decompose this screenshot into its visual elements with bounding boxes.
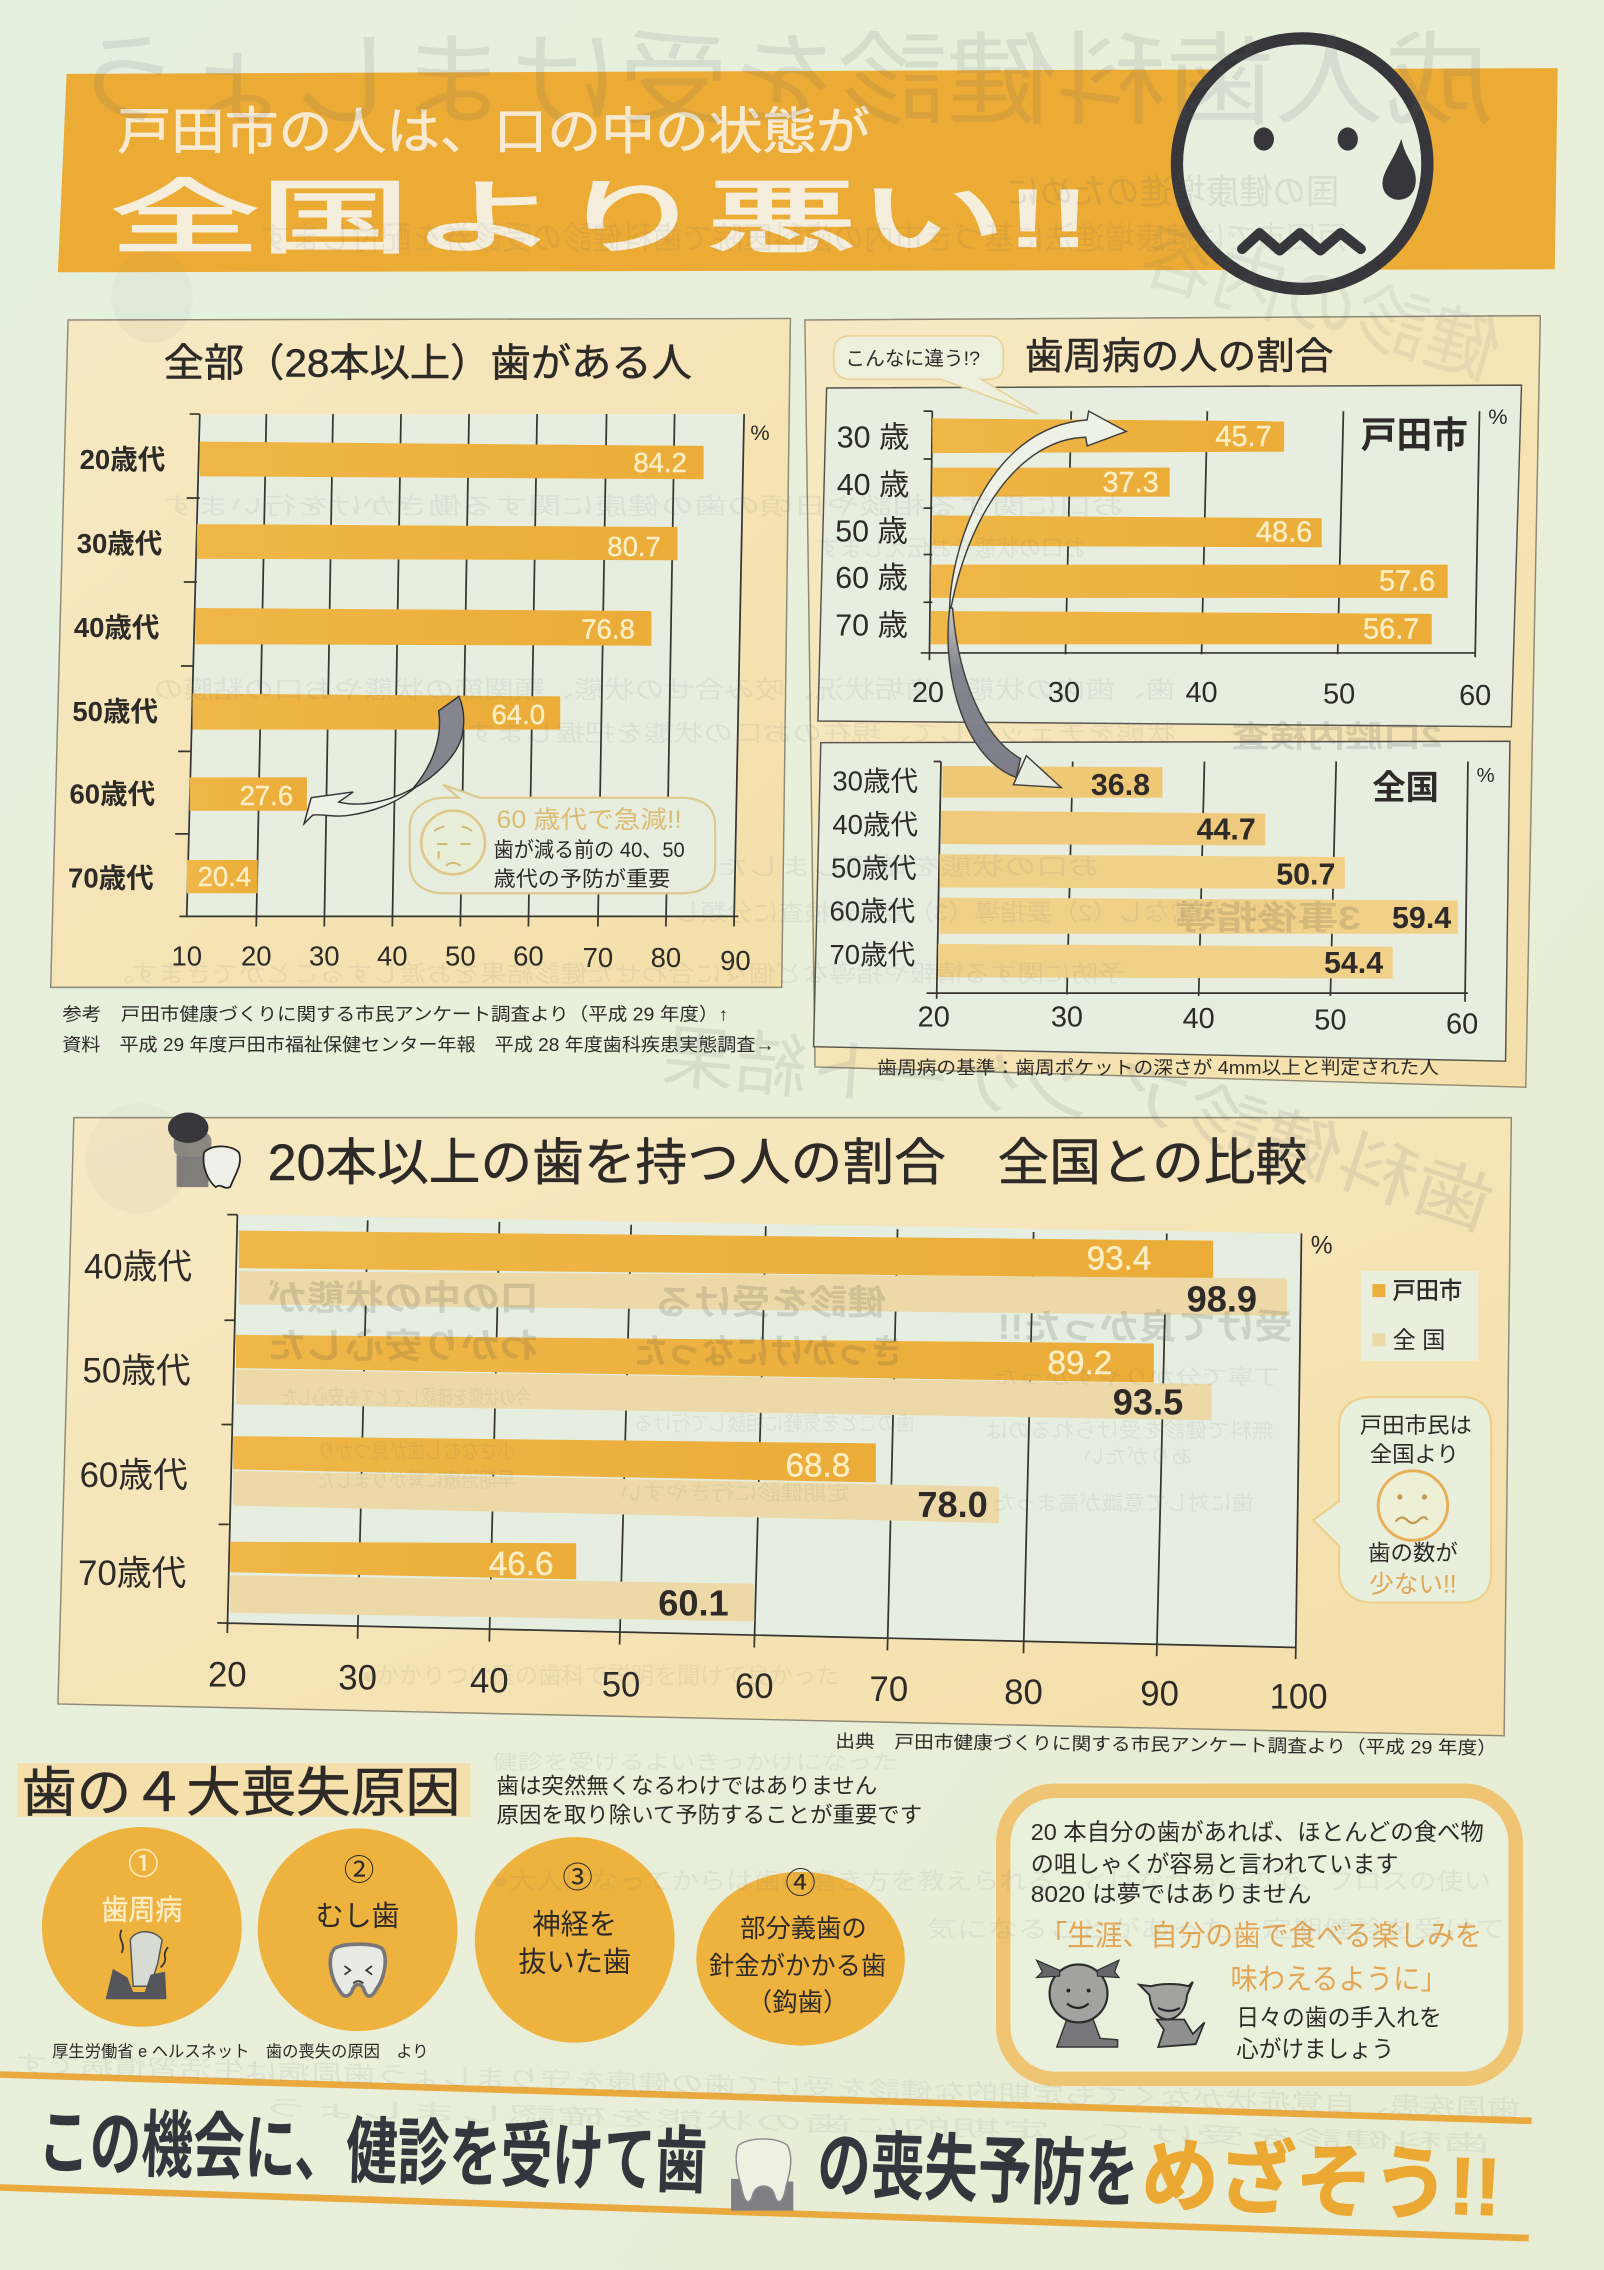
- axis labels: comparison: 90: [1140, 1675, 1179, 1713]
- cause 4: clasp tooth: [696, 1867, 905, 2046]
- source notes: left: [62, 1005, 774, 1055]
- axis labels: all teeth: 40: [377, 941, 408, 972]
- show-through print from reverse side: 状態をチェックして、現在のお口の状態を把握します: [466, 720, 1175, 746]
- axis labels: comparison: 60: [735, 1668, 774, 1706]
- cause 1: periodontal: [42, 1827, 242, 2027]
- bar values: comparison: [489, 1241, 1257, 1624]
- bar values: comparison: 98.9: [1187, 1279, 1257, 1320]
- intro text: four causes: 歯は突然無くなるわけではありません: [497, 1774, 877, 1799]
- cause 4: clasp tooth: （鈎歯）: [747, 1989, 848, 2017]
- show-through print from reverse side: 丁寧で分かりやすかった: [993, 1366, 1280, 1389]
- panel: 8020 message: の咀しゃくが容易と言われています: [1031, 1851, 1398, 1877]
- grid: [175, 414, 744, 927]
- panel: 20+ teeth comparison: [58, 1113, 1511, 1736]
- age labels: comparison: [78, 1247, 192, 1593]
- bar values: comparison: 60.1: [658, 1583, 729, 1624]
- show-through print from reverse side: 早期治療に繋がりました: [317, 1469, 515, 1492]
- bottom slogan: [37, 2102, 1502, 2233]
- bar values: comparison: 78.0: [917, 1484, 988, 1525]
- callout: fewer teeth: 全国より: [1370, 1442, 1459, 1467]
- bar values: all teeth: 80.7: [607, 531, 661, 562]
- chart: Toda city: 70 歳: [835, 609, 908, 643]
- show-through print from reverse side: 受けて良かった!!: [997, 1308, 1293, 1347]
- note: periodontal standard: 歯周病の基準：歯周ポケットの深さが 4mm以上と判定された人: [877, 1058, 1439, 1078]
- intro text: four causes: 原因を取り除いて予防することが重要です: [497, 1803, 922, 1828]
- bar values: all teeth: 76.8: [581, 613, 635, 644]
- chart: Toda city: 30: [1048, 677, 1080, 709]
- panel: 8020 message: 「生涯、自分の歯で食べる楽しみを: [1039, 1921, 1482, 1953]
- axis labels: comparison: 70: [870, 1671, 908, 1709]
- chart: Toda city: [818, 385, 1521, 727]
- callout: so different: [834, 336, 1038, 414]
- callout: sharp drop: 歳代の予防が重要: [494, 868, 670, 891]
- axis labels: all teeth: 30: [309, 941, 340, 972]
- callout: fewer teeth: 少ない!!: [1369, 1570, 1457, 1598]
- show-through print from reverse side: 気になることがあった。定期健診を受けて: [926, 1916, 1506, 1942]
- chart: national: 60歳代: [830, 896, 915, 927]
- chart: national: 40: [1183, 1003, 1215, 1035]
- chart: national: 50歳代: [831, 852, 917, 883]
- show-through print from reverse side: きっかけになった: [634, 1334, 903, 1372]
- show-through print from reverse side: 2口腔内検査: [1232, 720, 1442, 754]
- chart: national: [814, 741, 1510, 1061]
- show-through print from reverse side: 予防に関する情報や指導など個々に合わせた健診結果をお渡しすることができます。: [107, 961, 1125, 987]
- cause 3: nerve removed: [475, 1837, 675, 2043]
- axis labels: comparison: [208, 1233, 1333, 1716]
- bar values: all teeth: 84.2: [633, 447, 687, 478]
- bar values: all teeth: 27.6: [240, 780, 293, 811]
- chart: Toda city: 40: [1185, 677, 1218, 709]
- chart: national: 44.7: [1197, 813, 1256, 847]
- bar values: all teeth: 64.0: [491, 699, 545, 730]
- panel: 8020 message: 味わえるように」: [1231, 1964, 1448, 1996]
- chart: national: 全国: [1372, 770, 1439, 807]
- axis labels: comparison: 80: [1004, 1674, 1043, 1712]
- chart: Toda city: 30 歳: [837, 420, 909, 454]
- panel: 8020 message: 心がけましょう: [1236, 2036, 1394, 2062]
- age labels: all teeth: 70歳代: [68, 862, 154, 893]
- bar values: all teeth: 20.4: [198, 861, 251, 892]
- chart: Toda city: 40 歳: [837, 468, 909, 502]
- icon: person with tooth: [168, 1113, 240, 1188]
- bottom slogan: めざそう!!: [1140, 2131, 1502, 2233]
- source note: causes: 厚生労働省 e ヘルスネット 歯の喪失の原因 より: [52, 2042, 429, 2061]
- callout: fewer teeth: 歯の数が: [1368, 1541, 1458, 1566]
- axis labels: all teeth: 90: [720, 945, 751, 976]
- axis labels: comparison: 30: [338, 1659, 377, 1697]
- age labels: comparison: 40歳代: [84, 1247, 192, 1286]
- chart: Toda city: 20: [912, 677, 944, 709]
- source notes: left: 参考 戸田市健康づくりに関する市民アンケート調査より（平成 29 年度）↑: [62, 1005, 728, 1025]
- age labels: comparison: 50歳代: [83, 1352, 191, 1391]
- source note: comparison: 出典 戸田市健康づくりに関する市民アンケート調査より（平成 29 年度）: [835, 1731, 1497, 1758]
- callout: so different: こんなに違う!?: [845, 348, 980, 370]
- chart: national: 70歳代: [830, 939, 915, 970]
- show-through print from reverse side: 小さなむし歯が見つかり: [317, 1440, 515, 1463]
- cause 4: clasp tooth: 針金がかかる歯: [709, 1953, 886, 1981]
- cause 1: periodontal: ①: [128, 1848, 159, 1882]
- chart: national: 54.4: [1324, 946, 1383, 980]
- axis labels: all teeth: 10: [171, 941, 202, 972]
- chart: Toda city: 戸田市: [1361, 414, 1468, 455]
- show-through print from reverse side: 無料で健診を受けられるのは: [986, 1420, 1274, 1443]
- chart: national: 59.4: [1392, 901, 1451, 935]
- arrow: city to national: [948, 411, 1126, 788]
- age labels: all teeth: 30歳代: [77, 528, 162, 559]
- chart: national: 36.8: [1091, 768, 1150, 802]
- chart: national: 30歳代: [832, 765, 918, 796]
- age labels: comparison: 70歳代: [78, 1554, 186, 1593]
- show-through print from reverse side: 定期健診に行きやすい: [620, 1482, 850, 1505]
- age labels: all teeth: 50歳代: [72, 696, 158, 727]
- icon: diseased tooth: [106, 1930, 168, 1999]
- bar values: comparison: 68.8: [786, 1448, 850, 1485]
- age labels: all teeth: 20歳代: [80, 444, 165, 475]
- heading: all teeth: 全部（28本以上）歯がある人: [164, 342, 692, 385]
- show-through print from reverse side: ンケート結果: [659, 1017, 1098, 1133]
- heading: four causes: 歯の４大喪失原因: [22, 1764, 460, 1823]
- chart: Toda city: 45.7: [1215, 421, 1272, 453]
- show-through print from reverse side: 歯周疾患、自覚症状がなくても定期的な健診を受けて歯の健康を守りましょう歯周病は生活習慣病です: [15, 2051, 1521, 2122]
- chart: national: 30: [1051, 1001, 1083, 1033]
- chart: Toda city: 48.6: [1256, 516, 1312, 548]
- heading: periodontal: 歯周病の人の割合: [1025, 335, 1333, 377]
- chart: national: %: [1477, 765, 1495, 787]
- chart: national: 60: [1446, 1009, 1478, 1041]
- callout: fewer teeth: 戸田市民は: [1360, 1413, 1472, 1438]
- show-through print from reverse side: ありがたい: [1083, 1446, 1193, 1469]
- axis labels: all teeth: %: [750, 420, 770, 445]
- chart: national: 40歳代: [832, 809, 918, 840]
- cause 3: nerve removed: ③: [562, 1861, 593, 1895]
- axis labels: all teeth: 80: [651, 942, 681, 973]
- bars: Toda city: [230, 1231, 1213, 1579]
- banner headline: 全国より悪い!!: [110, 174, 1090, 264]
- callout: sharp drop: 歯が減る前の 40、50: [494, 839, 685, 862]
- chart: national: 50.7: [1276, 858, 1335, 892]
- cause 4: clasp tooth: 部分義歯の: [740, 1915, 867, 1943]
- arrow: sharp drop: [304, 696, 464, 824]
- cause 2: caries: ②: [344, 1854, 374, 1888]
- panel: all teeth chart: [51, 319, 790, 987]
- cause 3: nerve removed: 抜いた歯: [518, 1946, 631, 1978]
- panel: 8020 message: [1003, 1791, 1516, 2079]
- top banner: [58, 68, 1558, 272]
- show-through print from reverse side: 健診を受ける: [654, 1284, 886, 1323]
- axis labels: comparison: 20: [208, 1657, 247, 1695]
- callout: fewer teeth: [1313, 1397, 1491, 1603]
- show-through print from reverse side: 国の健康増進のために: [1006, 173, 1339, 212]
- cause 1: periodontal: 歯周病: [101, 1894, 182, 1926]
- panel: periodontal disease: [805, 316, 1540, 1087]
- show-through print from reverse side: わかり安心した: [268, 1327, 539, 1366]
- axis labels: comparison: 40: [470, 1662, 509, 1700]
- bar values: all teeth: [198, 447, 687, 892]
- show-through print from reverse side: 健診を受けるよいきっかけになった: [492, 1751, 898, 1774]
- chart: Toda city: 37.3: [1102, 467, 1159, 499]
- legend: 戸田市: [1393, 1278, 1462, 1304]
- divider line bottom: [0, 2187, 1529, 2238]
- cause 2: caries: [258, 1828, 457, 2031]
- age labels: all teeth: [68, 444, 165, 893]
- show-through print from reverse side: 3事後指導: [1175, 900, 1361, 937]
- legend: [1361, 1271, 1478, 1361]
- legend: 全 国: [1393, 1327, 1445, 1353]
- axis labels: comparison: 50: [602, 1667, 640, 1705]
- show-through print from reverse side: お口に関する相談や日頃の歯の健康に関する働きかけを行います: [164, 493, 1125, 519]
- icon: tooth: [731, 2139, 793, 2211]
- cause 4: clasp tooth: ④: [785, 1867, 816, 1901]
- chart: Toda city: 60 歳: [835, 561, 908, 595]
- chart: national: 20: [918, 1001, 950, 1033]
- axis labels: comparison: %: [1311, 1233, 1333, 1260]
- chart: Toda city: 50: [1323, 679, 1355, 711]
- icon: decayed tooth: [330, 1944, 385, 1996]
- axis labels: all teeth: 20: [241, 941, 272, 972]
- panel: 8020 message: 日々の歯の手入れを: [1236, 2004, 1442, 2030]
- show-through print from reverse side: 歯に対して意識が高まった: [993, 1492, 1254, 1515]
- show-through print from reverse side: （1）異常なし（2）要指導（3）要精密検査に分類し: [675, 900, 1288, 926]
- axis labels: all teeth: 50: [445, 941, 476, 972]
- bar values: comparison: 89.2: [1048, 1345, 1112, 1382]
- cause 2: caries: むし歯: [316, 1899, 400, 1931]
- chart: Toda city: %: [1488, 404, 1508, 429]
- show-through print from reverse side: ●大人になってからは歯の磨き方を教えられることはなかったので、フロスの使い: [492, 1868, 1491, 1894]
- chart: Toda city: 56.7: [1363, 613, 1419, 645]
- cause 3: nerve removed: 神経を: [532, 1908, 617, 1940]
- callout: sharp drop: 60 歳代で急減!!: [497, 806, 682, 834]
- chart: Toda city: 50 歳: [835, 514, 908, 548]
- chart: Toda city: 57.6: [1379, 566, 1435, 598]
- chart: Toda city: 60: [1459, 680, 1491, 712]
- axis labels: all teeth: 70: [583, 942, 613, 973]
- panel: 8020 message: 8020 は夢ではありません: [1031, 1881, 1312, 1907]
- icon: dog: [1139, 1982, 1204, 2047]
- show-through print from reverse side: お口の状態を確認しました: [717, 853, 1100, 879]
- bars: all teeth: [187, 442, 704, 893]
- show-through print from reverse side: 口の中の状態が: [268, 1279, 539, 1318]
- show-through print from reverse side: 歯、歯肉の状態、歯垢状況、咬み合せの状態、顎関節の状態やお口の粘膜の: [153, 676, 1175, 704]
- axis labels: all teeth: 60: [513, 941, 544, 972]
- show-through print from reverse side: 健診の内容: [1132, 212, 1510, 395]
- divider line top: [0, 2075, 1532, 2121]
- axis labels: comparison: 100: [1270, 1678, 1328, 1716]
- intro text: four causes: [497, 1774, 922, 1828]
- axis labels: all teeth: [171, 420, 770, 976]
- bottom slogan: の喪失予防を: [816, 2124, 1140, 2217]
- bar values: comparison: 46.6: [489, 1546, 554, 1583]
- grid: [217, 1215, 1301, 1659]
- age labels: comparison: 60歳代: [80, 1456, 188, 1495]
- show-through print from reverse side: お口の状態をお伝えします: [818, 535, 1086, 561]
- show-through print from reverse side: 歯科健診ア: [1101, 1048, 1503, 1245]
- show-through print from reverse side: 戸田市では健康増進法に基づき市内の歯科医院で歯科健診の受診券を配付します: [261, 220, 1346, 256]
- panel: 8020 message: 20 本自分の歯があれば、ほとんどの食べ物: [1031, 1819, 1484, 1845]
- heading: comparison: 20本以上の歯を持つ人の割合 全国との比較: [268, 1134, 1307, 1191]
- bottom slogan: この機会に、健診を受けて歯: [37, 2102, 708, 2203]
- source notes: left: 資料 平成 29 年度戸田市福祉保健センター年報 平成 28 年度歯科疾患実態調査→: [62, 1035, 774, 1055]
- show-through print from reverse side: 歯のことを気軽に相談して行ける: [634, 1412, 915, 1435]
- chart: national: 50: [1314, 1004, 1346, 1036]
- icon: worried face: [1177, 38, 1427, 289]
- bars: national: [230, 1271, 1287, 1621]
- show-through print from reverse side: ●かかりつけ医の歯科で説明を聞けて良かった: [362, 1663, 839, 1689]
- banner lead text: 戸田市の人は、口の中の状態が: [117, 103, 870, 160]
- show-through print from reverse side: 成人歯科健診を受けましょう: [72, 25, 1494, 138]
- bar values: comparison: 93.5: [1113, 1381, 1183, 1422]
- show-through print from reverse side: 今の状態を確認してとても安心した: [281, 1386, 531, 1409]
- callout: sharp drop: [410, 785, 715, 893]
- age labels: all teeth: 40歳代: [74, 612, 159, 643]
- age labels: all teeth: 60歳代: [69, 778, 155, 809]
- show-through print from reverse side: 歯科健診を受けて、定期的に歯の状態を確認しましょう: [261, 2095, 1492, 2156]
- bar values: comparison: 93.4: [1087, 1241, 1151, 1278]
- icon: girl: [1037, 1960, 1119, 2047]
